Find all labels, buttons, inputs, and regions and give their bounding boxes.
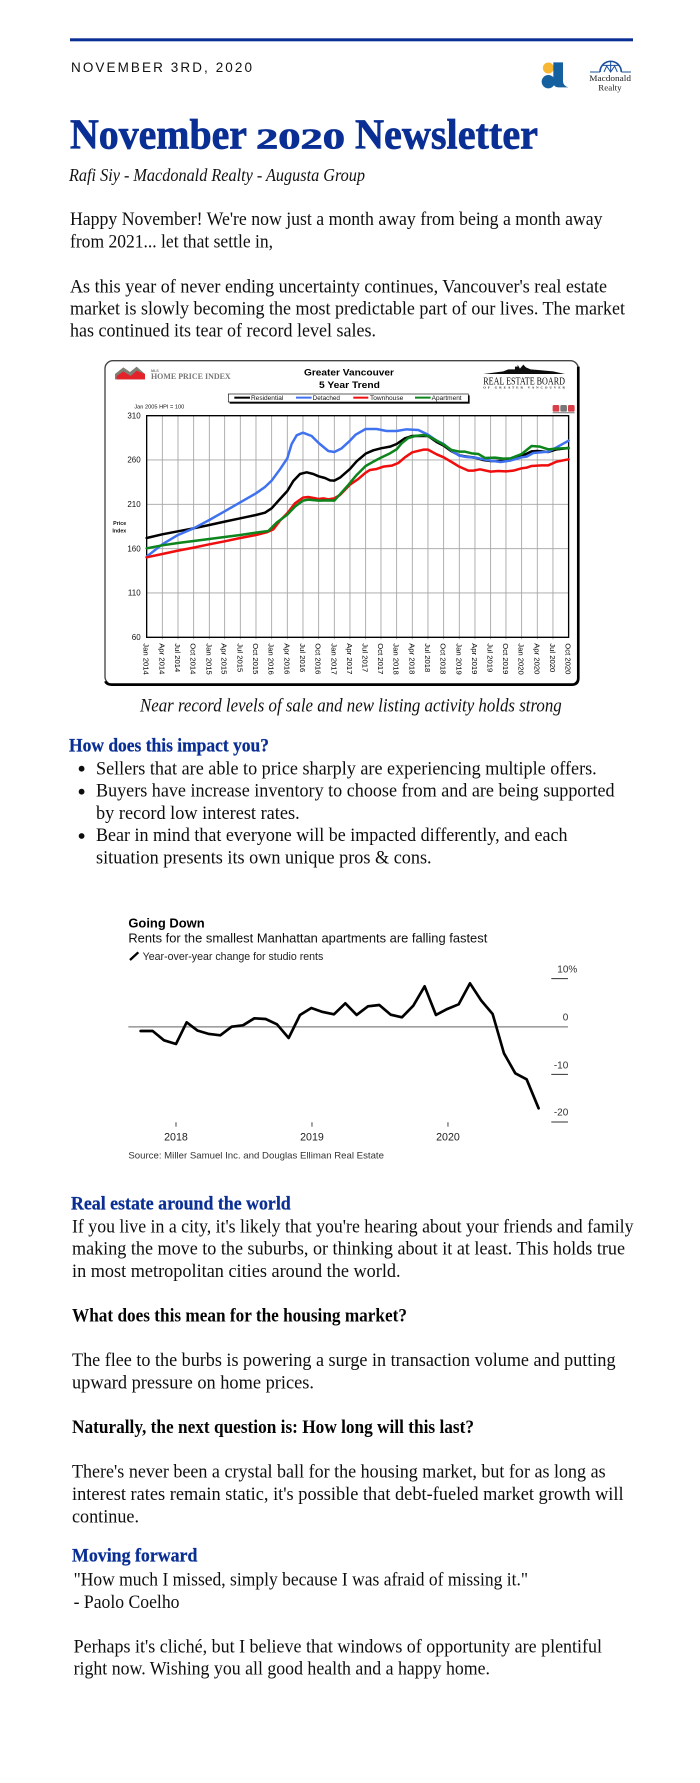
y axis labels: 110 [128, 589, 141, 598]
bullet one: Sellers that are able to price sharply are experiencing multiple offers. [96, 759, 597, 780]
title: 2020 [256, 123, 345, 155]
chart heading: Going Down [128, 915, 205, 930]
logo: Macdonald Realty: Realty [598, 83, 623, 92]
top rule [70, 38, 633, 41]
heading: moving forward: Moving forward [72, 1546, 198, 1567]
y axis labels: 0 [563, 1013, 569, 1024]
quote [74, 1569, 528, 1613]
bullet list [79, 759, 615, 869]
logo: Macdonald Realty: Macdonald [589, 74, 632, 83]
quote: "How much I missed, simply because I was afraid of missing it." [74, 1569, 528, 1590]
logo: real estate board: REAL ESTATE BOARD [483, 376, 565, 387]
x axis labels: Apr 2018 [407, 643, 416, 674]
legend: Townhouse [370, 395, 404, 402]
market paragraph: has continued its tear of record level sales. [70, 321, 376, 342]
chart heading: Greater Vancouver [304, 368, 395, 378]
series: detached [147, 429, 569, 557]
answer: crystal ball [72, 1462, 624, 1527]
grid [147, 416, 569, 639]
heading: real estate around the world: Real estate around the world [71, 1193, 291, 1214]
chart subheading: Rents for the smallest Manhattan apartments are falling fastest [128, 930, 488, 945]
logo: real estate board [483, 365, 566, 389]
answer: crystal ball: continue. [72, 1506, 139, 1527]
x axis labels: Oct 2017 [376, 643, 385, 674]
y axis labels: 160 [127, 544, 141, 553]
y axis labels [554, 964, 577, 1119]
y axis title: Price [113, 521, 126, 527]
y axis title: Index [112, 528, 126, 534]
axes [147, 416, 569, 637]
closing paragraph: Perhaps it's cliché, but I believe that windows of opportunity are plentiful [74, 1636, 602, 1657]
legend: Year-over-year change for studio rents [143, 951, 323, 963]
x axis labels: 2019 [300, 1132, 324, 1144]
x axis labels: 2020 [436, 1132, 460, 1144]
logo: Macdonald Realty [589, 61, 632, 92]
legend [228, 394, 470, 404]
chart caption: Near record levels of sale and new listing activity holds strong [139, 696, 562, 717]
chart: Greater Vancouver 5 year trend [105, 361, 578, 685]
x axis labels [142, 643, 573, 676]
series: apartment [147, 435, 569, 548]
market paragraph: As this year of never ending uncertainty continues, Vancouver's real estate [70, 276, 607, 297]
x axis labels: Apr 2017 [345, 643, 354, 674]
intro paragraph [70, 209, 603, 253]
bullet two [79, 781, 615, 824]
x axis labels: Jul 2017 [361, 643, 370, 672]
y axis title [112, 521, 126, 534]
answer: flee to the burbs [72, 1350, 616, 1393]
x axis labels: Jul 2015 [235, 643, 244, 672]
question: how long: Naturally, the next question is: How long will this last? [72, 1417, 474, 1438]
y axis rules [551, 979, 568, 1122]
intro paragraph: Happy November! We're now just a month away from being a month away [70, 209, 603, 230]
world paragraph: making the move to the suburbs, or thinking about it at least. This holds true [72, 1239, 625, 1260]
x axis labels: Jan 2020 [517, 643, 526, 675]
logo: Augusta group [542, 62, 568, 88]
logo: home price index: HOME PRICE INDEX [151, 372, 231, 381]
x axis labels: Apr 2014 [157, 643, 166, 675]
logo: real estate board: OF GREATER VANCOUVER [483, 385, 566, 389]
quote: - Paolo Coelho [74, 1592, 180, 1613]
x axis labels: Jul 2020 [548, 643, 557, 672]
x axis labels: Jul 2019 [486, 643, 495, 672]
base note: Jan 2005 HPI = 100 [134, 405, 184, 411]
chart: going down [128, 915, 577, 1161]
title [70, 112, 538, 158]
y axis labels: -10 [554, 1060, 569, 1071]
byline: Rafi Siy - Macdonald Realty - Augusta Group [68, 165, 365, 185]
chart frame shadow [105, 367, 578, 685]
heading: how does this impact you: How does this impact you? [69, 736, 269, 757]
answer: crystal ball: There's never been a crystal ball for the housing market, but for as long as [72, 1462, 606, 1483]
question: housing market: What does this mean for the housing market? [72, 1306, 407, 1327]
x axis labels: Jul 2016 [298, 643, 307, 672]
world paragraph: in most metropolitan cities around the world. [72, 1261, 401, 1282]
x axis labels [164, 1132, 460, 1144]
x axis labels: Jan 2018 [392, 643, 401, 675]
x axis labels: Apr 2020 [532, 643, 541, 674]
market paragraph: market is slowly becoming the most predictable part of our lives. The market [70, 298, 626, 319]
world paragraph [72, 1217, 634, 1282]
source note: Source: Miller Samuel Inc. and Douglas Elliman Real Estate [128, 1151, 384, 1161]
bullet three [79, 825, 568, 869]
y axis labels: 60 [132, 633, 141, 642]
social icons [553, 405, 575, 413]
date line: NOVEMBER 3RD, 2020 [71, 60, 252, 75]
zero line [128, 1026, 568, 1028]
x axis labels: 2018 [164, 1132, 188, 1144]
y axis labels: 210 [127, 500, 141, 509]
x axis labels: Oct 2015 [251, 643, 260, 674]
chart heading: 5 Year Trend [319, 380, 380, 390]
closing paragraph [74, 1636, 602, 1680]
y axis labels: 310 [127, 411, 141, 420]
x axis labels: Oct 2019 [501, 643, 510, 674]
world paragraph: If you live in a city, it's likely that you're hearing about your friends and family [72, 1217, 634, 1238]
title: November [70, 112, 247, 158]
answer: crystal ball: interest rates remain static, it's possible that debt-fueled market growth will [72, 1484, 624, 1505]
bullet two: by record low interest rates. [96, 803, 300, 824]
x axis labels: Apr 2016 [282, 643, 291, 674]
market paragraph [70, 276, 626, 342]
logo: home price index [115, 367, 231, 381]
bullet two: Buyers have increase inventory to choose from and are being supported [96, 781, 615, 802]
x axis labels: Oct 2016 [314, 643, 323, 674]
chart heading [304, 368, 395, 390]
answer: flee to the burbs: The flee to the burbs is powering a surge in transaction volume and putting [72, 1350, 616, 1371]
x axis ticks [176, 1122, 448, 1127]
x axis labels: Apr 2019 [470, 643, 479, 674]
legend: Apartment [432, 395, 462, 402]
series: residential [147, 436, 569, 538]
x axis labels: Jul 2018 [423, 643, 432, 672]
y axis labels [127, 411, 141, 642]
bullet three: Bear in mind that everyone will be impacted differently, and each [96, 825, 568, 846]
x axis labels: Apr 2015 [220, 643, 229, 674]
legend: Detached [313, 395, 340, 402]
logo: home price index: MLS [151, 369, 159, 373]
x axis labels: Oct 2020 [564, 643, 573, 674]
answer: flee to the burbs: upward pressure on home prices. [72, 1372, 314, 1393]
bullet three: situation presents its own unique pros & cons. [96, 848, 432, 869]
rent line [141, 983, 539, 1108]
x axis labels: Oct 2018 [439, 643, 448, 674]
x axis labels: Jan 2017 [329, 643, 338, 675]
series: townhouse [147, 450, 569, 557]
intro paragraph: from 2021... let that settle in, [70, 232, 273, 253]
x axis labels: Jan 2019 [454, 643, 463, 675]
x axis labels: Oct 2014 [189, 643, 198, 675]
x axis labels: Jul 2014 [173, 643, 182, 673]
chart frame [105, 361, 578, 685]
closing paragraph: right now. Wishing you all good health and a happy home. [74, 1659, 490, 1680]
legend: Residential [251, 395, 283, 402]
y axis labels: -20 [554, 1108, 569, 1119]
x axis labels: Jan 2014 [142, 643, 151, 676]
y axis labels: 260 [127, 456, 141, 465]
x axis labels: Jan 2015 [204, 643, 213, 675]
x axis labels: Jan 2016 [267, 643, 276, 675]
title: Newsletter [355, 112, 538, 158]
y axis labels: 10% [557, 964, 577, 975]
